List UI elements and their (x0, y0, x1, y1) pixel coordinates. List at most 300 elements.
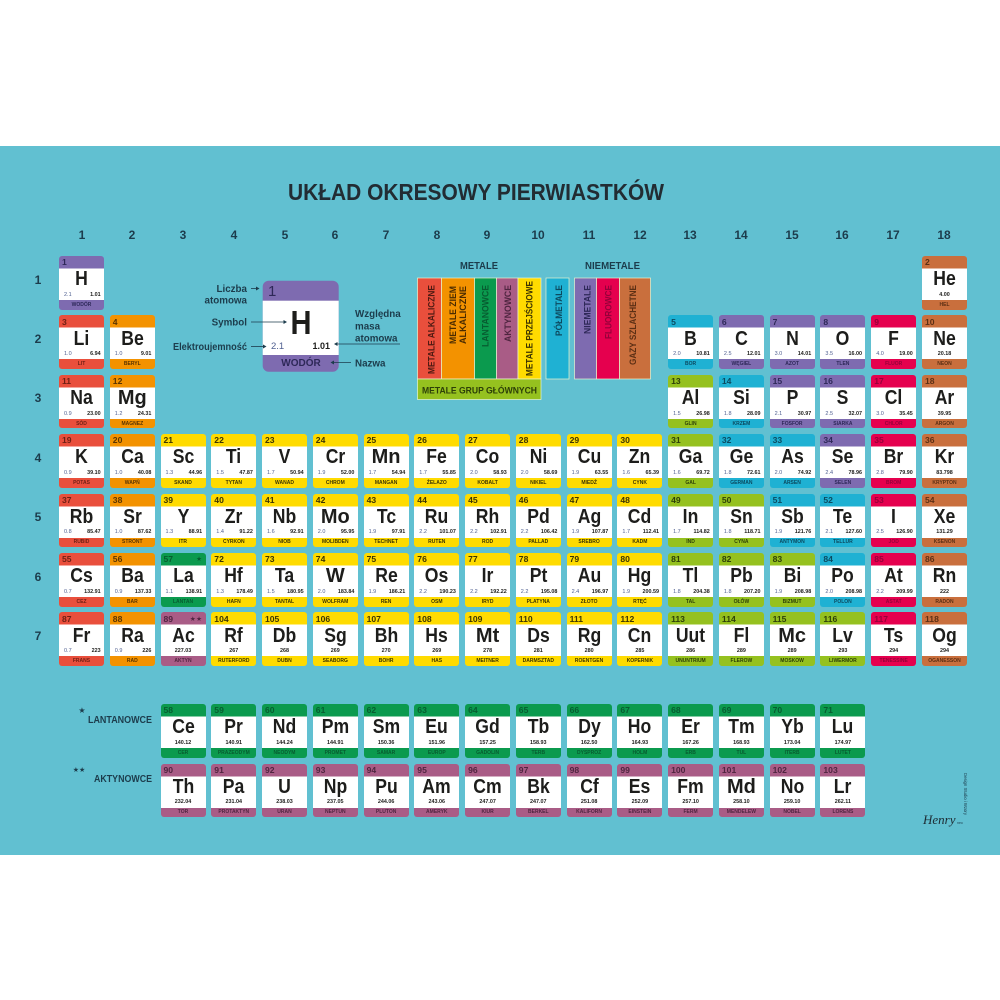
element Y: Y (177, 506, 189, 528)
element Ts: 294 (889, 648, 898, 654)
element Cu: 1.9 (572, 470, 579, 476)
element Ra: RAD (127, 658, 138, 664)
element F: 9 (874, 317, 879, 327)
key card: 1 (268, 283, 276, 300)
element Fr (59, 612, 104, 666)
element Hf (211, 553, 256, 606)
element Ar: 39.95 (938, 411, 951, 417)
element Rg (567, 612, 612, 666)
element Al: 26.98 (696, 411, 710, 417)
element W: 183.84 (338, 589, 354, 595)
element Si: 14 (722, 376, 731, 386)
element Gd: 64 (468, 705, 478, 715)
element Pu (364, 764, 409, 817)
element At: At (884, 565, 903, 587)
element Se: 34 (823, 435, 833, 445)
element Rh: Rh (476, 506, 499, 528)
group numbers: 4 (231, 228, 238, 242)
element Pt: 78 (519, 554, 528, 564)
element Ac (160, 612, 206, 666)
element N: 7 (773, 317, 777, 327)
element Cn: KOPERNIK (627, 658, 653, 664)
heading: actinides: ★★ (73, 766, 85, 774)
element Mc (770, 612, 815, 666)
element Pu: 244.06 (378, 799, 394, 805)
element Mg: MAGNEZ (121, 421, 143, 427)
element Ts: Ts (884, 625, 903, 647)
element H (59, 256, 104, 310)
legend metals group (418, 278, 541, 400)
element Cr: 52.00 (341, 470, 354, 476)
element Bi: 208.98 (795, 589, 811, 595)
element Ne: 20.18 (938, 351, 951, 357)
element Rb: RUBID (74, 539, 89, 545)
element Lu (820, 704, 865, 758)
element Pu: PLUTON (376, 809, 396, 815)
element Co (465, 434, 510, 488)
element O: O (836, 328, 850, 350)
element Rf: Rf (225, 625, 243, 647)
element U: U (278, 776, 291, 798)
group numbers: 15 (785, 228, 799, 242)
element Cl (871, 375, 916, 428)
element Li (59, 315, 104, 369)
element Hs (414, 612, 459, 666)
element As: ARSEN (783, 480, 801, 486)
element Sg (313, 612, 358, 666)
element Cr: 24 (316, 435, 325, 445)
element Re (364, 553, 409, 606)
element Te: Te (833, 506, 853, 528)
element Sc: 21 (164, 435, 173, 445)
element Pd (516, 494, 561, 547)
element Ds (516, 612, 561, 666)
element Th: Th (172, 776, 194, 798)
element He: He (933, 268, 956, 290)
element No: No (780, 776, 804, 798)
element Te: 52 (823, 495, 833, 505)
element Rh: ROD (482, 539, 493, 545)
period numbers: 7 (35, 629, 42, 643)
element Nb: 92.91 (290, 529, 304, 535)
element Cd: 48 (620, 495, 630, 505)
element Rh (465, 494, 510, 547)
element Ho: Ho (628, 716, 652, 738)
element Db (262, 612, 307, 666)
element P: 2.1 (775, 411, 782, 417)
element Bh: 270 (382, 648, 391, 654)
element Hs: Hs (426, 625, 448, 647)
element La: LANTAN (173, 599, 193, 605)
label: relative atomic mass (334, 309, 401, 346)
element Nd: 60 (265, 705, 275, 715)
element No (770, 764, 815, 817)
element Ne: Ne (933, 328, 956, 350)
element Cl: Cl (885, 387, 902, 409)
element Th: 90 (164, 765, 173, 775)
element Ag: Ag (577, 506, 601, 528)
label: name (330, 358, 386, 370)
element Br: Br (884, 446, 903, 468)
element Sc: Sc (172, 446, 194, 468)
element Og (922, 612, 967, 666)
element H: WODÓR (72, 302, 91, 308)
element Na: Na (70, 387, 93, 409)
group numbers: 16 (835, 228, 849, 242)
label: symbol: Symbol (212, 318, 247, 328)
element Mn: 1.7 (369, 470, 376, 476)
element Re: 1.9 (369, 589, 376, 595)
element Ni: NIKIEL (530, 480, 546, 486)
element Ti: Ti (226, 446, 241, 468)
legend nonmetals group (574, 278, 650, 379)
label: relative atomic mass: Względna (355, 309, 401, 320)
element Sr: 38 (113, 495, 122, 505)
element La: La (173, 565, 193, 587)
element Cf: 251.08 (581, 799, 597, 805)
element K: POTAS (73, 480, 90, 486)
element Sm: 150.36 (378, 740, 394, 746)
element S: S (837, 387, 849, 409)
element Mt: 109 (468, 614, 482, 624)
element Tc: 1.9 (369, 529, 376, 535)
element Mg: 1.2 (115, 411, 122, 417)
element Gd: 157.25 (479, 740, 496, 746)
element Cn: Cn (628, 625, 652, 647)
element K (59, 434, 104, 488)
element Se: SELEN (835, 480, 851, 486)
element Dy (567, 704, 612, 758)
element Pd: 2.2 (521, 529, 528, 535)
element Ho: HOLM (633, 750, 647, 756)
element Mt: MEITNER (476, 658, 499, 664)
element Ni: 58.69 (544, 470, 557, 476)
element Og: Og (932, 625, 957, 647)
element S (820, 375, 865, 428)
element Og: OGANESSON (928, 658, 961, 664)
element Bi: 83 (773, 554, 782, 564)
element O: 8 (823, 317, 828, 327)
element Br: 2.8 (876, 470, 884, 476)
element Tl: TAL (686, 599, 695, 605)
element Tm: 69 (722, 705, 731, 715)
element Te: TELLUR (833, 539, 853, 545)
element At: ASTAT (886, 599, 902, 605)
element Br: 79.90 (899, 470, 913, 476)
element Uut: 113 (671, 614, 685, 624)
element N (770, 315, 815, 369)
element Pr: PRAZEODYM (218, 750, 250, 756)
element Yb: Yb (781, 716, 803, 738)
element Zn (617, 434, 662, 488)
element Tc: TECHNET (374, 539, 398, 545)
element Ir: 77 (468, 554, 478, 564)
element Ir (465, 553, 510, 606)
element Pr (211, 704, 256, 758)
element Pu: Pu (375, 776, 397, 798)
element Cf: 98 (570, 765, 579, 775)
element Sr: Sr (123, 506, 142, 528)
element N: AZOT (785, 361, 799, 367)
element Al: GLIN (685, 421, 697, 427)
element Si: Si (733, 387, 750, 409)
element P (770, 375, 815, 428)
element Fe (414, 434, 459, 488)
element Tc: 97.91 (392, 529, 405, 535)
element Tm: TUL (737, 750, 746, 756)
element Np (313, 764, 358, 817)
element Md (719, 764, 764, 817)
element Pm (313, 704, 358, 758)
element Br (871, 434, 916, 488)
element Er: 68 (671, 705, 681, 715)
key card: 1.01 (312, 341, 330, 351)
element Sm: SAMAR (377, 750, 395, 756)
element Te: 2.1 (825, 529, 833, 535)
element Bk: Bk (527, 776, 550, 798)
element Sn: CYNA (734, 539, 748, 545)
element Cm: Cm (473, 776, 502, 798)
element K: K (75, 446, 88, 468)
group numbers: 18 (937, 228, 951, 242)
element Hg (617, 553, 662, 606)
element Xe: Xe (934, 506, 955, 528)
element Nb: NIOB (278, 539, 291, 545)
element Mn: Mn (372, 446, 401, 468)
element Ba (110, 553, 155, 606)
element Tl: 204.38 (693, 589, 710, 595)
element N: 14.01 (798, 351, 811, 357)
element K: 39.10 (87, 470, 101, 476)
element Pb (719, 553, 764, 606)
element Kr (922, 434, 967, 488)
element Xe: KSENON (934, 539, 955, 545)
element Md: 258.10 (733, 799, 750, 805)
element Sb: ANTYMON (779, 539, 805, 545)
group numbers: 2 (129, 228, 136, 242)
element Ba: Ba (121, 565, 144, 587)
element I: 2.5 (876, 529, 884, 535)
element La: ★ (196, 555, 202, 563)
element Ce: 58 (164, 705, 173, 715)
element Ba: 0.9 (115, 589, 122, 595)
element Np: NEPTUN (325, 809, 346, 815)
element Og: 118 (925, 614, 939, 624)
element B: B (684, 328, 697, 350)
element Ar (922, 375, 967, 428)
element Pb: 207.20 (744, 589, 760, 595)
element Co: 27 (468, 435, 478, 445)
element Sb: 51 (773, 495, 782, 505)
element U (262, 764, 307, 817)
element Eu (414, 704, 459, 758)
element W (313, 553, 358, 606)
element La: 57 (164, 554, 173, 564)
element Ca: 1.0 (115, 470, 122, 476)
element C: C (735, 328, 748, 350)
element Cd: 112.41 (643, 529, 659, 535)
element Pr: 140.91 (226, 740, 242, 746)
element Tb: Tb (528, 716, 549, 738)
element Cr: 1.9 (318, 470, 325, 476)
element Bk (516, 764, 561, 817)
element Po: 84 (823, 554, 833, 564)
group numbers: 12 (633, 228, 647, 242)
label: relative atomic mass: masa (355, 322, 381, 332)
element Pd: Pd (527, 506, 550, 528)
element Ga: Ga (679, 446, 702, 468)
element Pt: 2.2 (521, 589, 528, 595)
element Gd: GADOLIN (476, 750, 499, 756)
element At: 2.2 (876, 589, 884, 595)
element Rn: 86 (925, 554, 935, 564)
heading: actinides (73, 766, 152, 785)
element Lu: LUTET (835, 750, 851, 756)
element Mo: MOLIBDEN (322, 539, 349, 545)
element Bi: 1.9 (775, 589, 782, 595)
element O: 3.5 (825, 351, 833, 357)
signature: Henry (922, 812, 956, 827)
element Yb: ITERB (785, 750, 800, 756)
element Tc: 43 (367, 495, 376, 505)
element Li: Li (74, 328, 89, 350)
element Fm: 257.10 (682, 799, 699, 805)
element Fe: 26 (417, 435, 427, 445)
element Fe: ŻELAZO (427, 480, 447, 486)
key card: H (290, 304, 312, 341)
element Rg: 280 (585, 648, 594, 654)
element Rf (211, 612, 256, 666)
element Fe: 1.7 (419, 470, 427, 476)
element Co: Co (476, 446, 499, 468)
element Os: 76 (417, 554, 427, 564)
element As: 74.92 (798, 470, 811, 476)
group numbers: 5 (282, 228, 289, 242)
element Ga: GAL (685, 480, 696, 486)
element Hg: RTĘĆ (633, 599, 647, 605)
element Ni: 28 (519, 435, 528, 445)
period numbers: 6 (35, 570, 42, 584)
background panel (0, 146, 1000, 855)
element Ti: 1.5 (216, 470, 224, 476)
element Rb: 0.8 (64, 529, 72, 535)
element Cm: KIUR (481, 809, 494, 815)
element Re: REN (381, 599, 391, 605)
element Yb (770, 704, 815, 758)
element Cm: 96 (468, 765, 478, 775)
element S: 32.07 (848, 411, 862, 417)
element Fl: FLEROW (731, 658, 752, 664)
element Ds: DARMSZTAD (523, 658, 554, 664)
element Ac: 227.03 (175, 648, 191, 654)
element Ca (110, 434, 155, 488)
element Xe: 131.29 (936, 529, 953, 535)
element Cs: Cs (70, 565, 93, 587)
element Nb (262, 494, 307, 547)
element Rg: 111 (570, 614, 583, 624)
element Fl: Fl (734, 625, 749, 647)
element Pd: PALLAD (528, 539, 548, 545)
element Fl (719, 612, 764, 666)
element Mg: Mg (118, 387, 147, 409)
element Lv (820, 612, 865, 666)
legend labels: METALE ALKALICZNE (426, 285, 438, 374)
element Ho: 67 (620, 705, 630, 715)
element Am: AMERYK (426, 809, 448, 815)
element Sg: 106 (316, 614, 330, 624)
label: symbol (212, 318, 287, 328)
element Ir: IRYD (482, 599, 493, 605)
element K: 19 (62, 435, 72, 445)
element Mn (364, 434, 409, 488)
element Ru: 2.2 (419, 529, 427, 535)
element Gd (465, 704, 510, 758)
element Au: ZŁOTO (581, 599, 598, 605)
element At: 209.99 (896, 589, 913, 595)
element Al: 1.5 (673, 411, 681, 417)
element Hg: 1.9 (622, 589, 630, 595)
element Uut: Uut (676, 625, 705, 647)
element La (160, 553, 206, 606)
element Pm: PROMET (325, 750, 346, 756)
element Cl: CHLOR (885, 421, 903, 427)
element Po: 2.0 (825, 589, 833, 595)
element Pr: 59 (214, 705, 224, 715)
element Ar: Ar (935, 387, 954, 409)
element I: 126.90 (896, 529, 913, 535)
element V: WANAD (275, 480, 294, 486)
element Cl: 35.45 (899, 411, 913, 417)
element Yb: 70 (773, 705, 782, 715)
element Md: Md (727, 776, 756, 798)
element Fm: Fm (677, 776, 704, 798)
element Xe (922, 494, 967, 547)
element Sr: 1.0 (115, 529, 122, 535)
element Cs (59, 553, 104, 606)
label: atomic number: Liczba (216, 284, 248, 295)
element Bh: BOHR (379, 658, 393, 664)
element Tl (668, 553, 713, 606)
legend labels: METALE GRUP GŁÓWNYCH (422, 384, 537, 396)
element Rg: ROENTGEN (575, 658, 603, 664)
element F: 19.00 (899, 351, 913, 357)
element Sm (364, 704, 409, 758)
element Sr: 87.62 (138, 529, 151, 535)
element Cn: 112 (620, 614, 634, 624)
element Ra: 88 (113, 614, 122, 624)
element Es: Es (629, 776, 651, 798)
element Ac: 89 (164, 614, 173, 624)
key card: WODÓR (281, 356, 321, 369)
element S: 16 (823, 376, 833, 386)
element Bi: Bi (783, 565, 801, 587)
element Sc: 44.96 (189, 470, 202, 476)
element Ca: 40.08 (138, 470, 151, 476)
element Co: 2.0 (470, 470, 478, 476)
element F: 4.0 (876, 351, 884, 357)
element Md: MENDELEW (727, 809, 756, 815)
element Ti (211, 434, 256, 488)
element Rb: 37 (62, 495, 72, 505)
element In: 114.82 (694, 529, 710, 535)
element W: WOLFRAM (322, 599, 348, 605)
element Hf: 178.49 (236, 589, 253, 595)
group numbers: 17 (886, 228, 900, 242)
element Es: 99 (620, 765, 630, 775)
element Pd: 46 (519, 495, 528, 505)
group numbers: 9 (484, 228, 491, 242)
element Ag (567, 494, 612, 547)
